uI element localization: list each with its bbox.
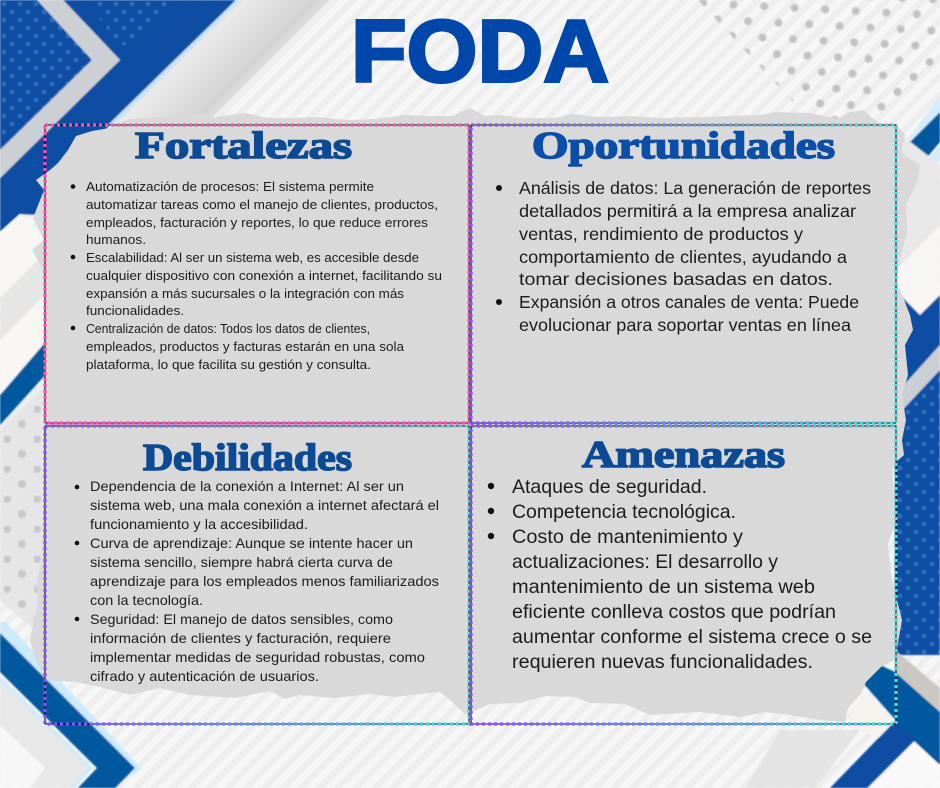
list: debilidades: sistema sencillo, siempre habrá cierta curva de [90, 555, 393, 570]
frame: amenazas [471, 426, 896, 724]
shapes: top left blue chevrons [0, 0, 242, 232]
list: fortalezas: Centralización de datos: Todos los datos de clientes, [86, 321, 370, 336]
list: oportunidades: detallados permitirá a la empresa analizar [519, 201, 856, 221]
title: FODA [351, 2, 609, 100]
heading: fortalezas: Fortalezas [135, 125, 352, 167]
list: debilidades: cifrado y autenticación de usuarios. [90, 669, 319, 684]
torn paper panel [30, 108, 920, 722]
list: oportunidades: evolucionar para soportar ventas en línea [519, 315, 851, 335]
list: fortalezas: Escalabilidad: Al ser un sistema web, es accesible desde [86, 250, 419, 265]
shapes: left white arrow and blue band [0, 214, 48, 425]
list: fortalezas: empleados, productos y facturas estarán en una sola [86, 339, 405, 354]
shapes: lower right bands [745, 650, 940, 788]
list: amenazas: requieren nuevas funcionalidades. [512, 652, 813, 673]
list: debilidades: Dependencia de la conexión a Internet: Al ser un [90, 479, 404, 494]
list: amenazas: actualizaciones: El desarrollo y [512, 552, 778, 573]
list: fortalezas: expansión a más sucursales o la integración con más [86, 286, 405, 301]
pattern: grey dots top right [695, 0, 940, 125]
pattern: grey dots left [0, 385, 46, 640]
list: fortalezas: funcionalidades. [86, 303, 184, 318]
shapes: lower left blue chevron [0, 622, 141, 788]
list: amenazas: Ataques de seguridad. [512, 477, 707, 498]
list: amenazas [488, 477, 872, 673]
list: fortalezas: cualquier dispositivo con conexión a internet, facilitando su [86, 268, 442, 283]
list: fortalezas: plataforma, lo que facilita su gestión y consulta. [86, 357, 371, 372]
list: fortalezas: automatizar tareas como el manejo de clientes, productos, [86, 197, 438, 212]
heading: amenazas: Amenazas [582, 434, 785, 476]
list: debilidades: implementar medidas de seguridad robustas, como [90, 650, 425, 665]
list: debilidades: sistema web, una mala conexión a internet afectará el [90, 498, 439, 513]
list: amenazas: Competencia tecnológica. [512, 502, 736, 523]
heading: debilidades: Debilidades [143, 437, 352, 479]
list: debilidades: funcionamiento y la accesibilidad. [90, 517, 308, 532]
list: debilidades: con la tecnología. [90, 593, 203, 608]
list: fortalezas: humanos. [86, 232, 146, 247]
list: oportunidades: Expansión a otros canales de venta: Puede [519, 292, 859, 312]
list: amenazas: mantenimiento de un sistema web [512, 577, 815, 598]
list: debilidades: Curva de aprendizaje: Aunque se intente hacer un [90, 536, 413, 551]
panel: debilidades [75, 437, 439, 684]
list: debilidades: Seguridad: El manejo de datos sensibles, como [90, 612, 393, 627]
heading: oportunidades: Oportunidades [532, 125, 835, 167]
panel: oportunidades [496, 125, 871, 335]
list: debilidades [75, 479, 439, 684]
list: amenazas: eficiente conlleva costos que podrían [512, 602, 836, 623]
list: oportunidades [496, 178, 871, 335]
list: debilidades: información de clientes y facturación, requiere [90, 631, 391, 646]
frame: debilidades [45, 426, 469, 724]
list: fortalezas: empleados, facturación y reportes, lo que reduce errores [86, 215, 429, 230]
list: debilidades: aprendizaje para los empleados menos familiarizados [90, 574, 439, 589]
panel: fortalezas [71, 125, 442, 372]
list: oportunidades: tomar decisiones basadas en datos. [519, 269, 833, 289]
list: fortalezas [71, 179, 442, 372]
list: amenazas: aumentar conforme el sistema crece o se [512, 627, 872, 648]
frame: fortalezas [45, 125, 469, 423]
list: oportunidades: comportamiento de clientes, ayudando a [519, 247, 847, 267]
list: fortalezas: Automatización de procesos: El sistema permite [86, 179, 374, 194]
list: oportunidades: Análisis de datos: La generación de reportes [519, 178, 871, 198]
frame: oportunidades [471, 125, 896, 423]
shapes: right bands [895, 95, 940, 655]
panel: amenazas [488, 434, 872, 673]
list: oportunidades: ventas, rendimiento de productos y [519, 224, 803, 244]
list: amenazas: Costo de mantenimiento y [512, 527, 743, 548]
